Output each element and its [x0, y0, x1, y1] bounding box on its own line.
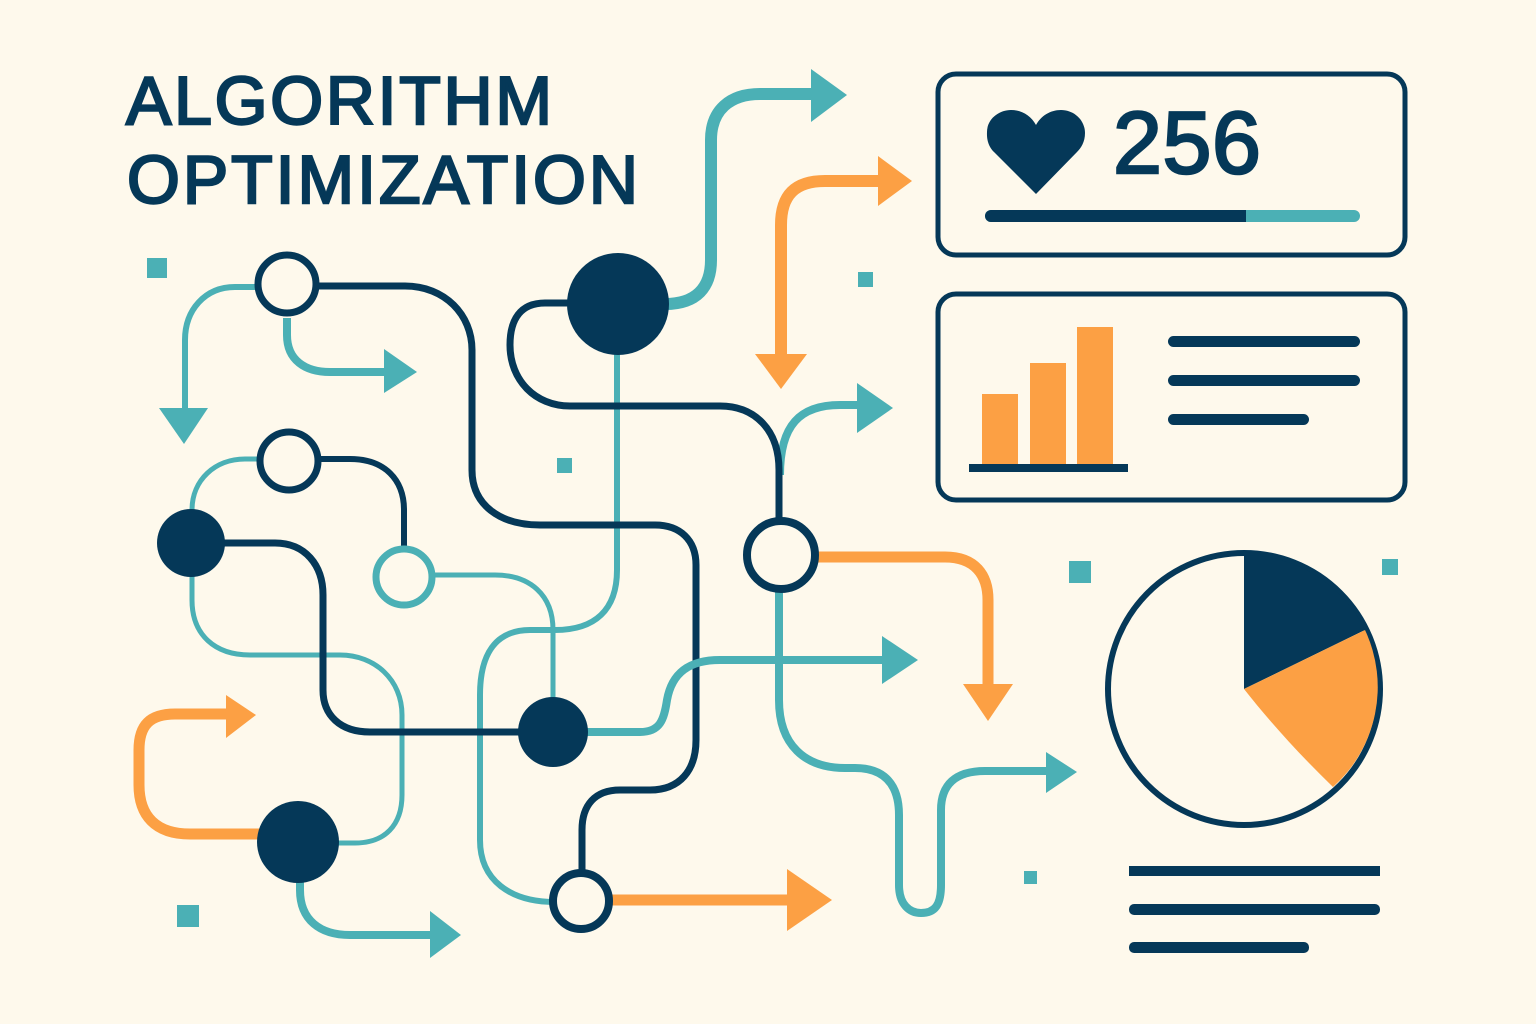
- teal arrow: lower right long curve: [779, 590, 1077, 913]
- text placeholder lines: [1168, 336, 1360, 425]
- node: top large filled: [567, 253, 669, 355]
- teal arrow: top-left node curving down: [159, 287, 258, 444]
- orange arrow: bottom circle to right: [610, 869, 832, 931]
- node: left filled: [157, 509, 225, 577]
- teal arrow: top-left node curving right: [287, 318, 417, 393]
- score number: 256: [1113, 93, 1261, 192]
- title: ALGORITHM: [126, 63, 552, 139]
- legend placeholder lines: [1129, 866, 1380, 953]
- node: top-left hollow: [258, 255, 316, 313]
- teal line: small teal circle to middle node: [435, 575, 553, 700]
- node: bottom-left filled: [257, 801, 339, 883]
- orange arrow: right circle down: [815, 557, 1013, 721]
- node: teal hollow: [376, 549, 432, 605]
- node: right hollow: [747, 521, 815, 589]
- orange double arrow: [755, 156, 912, 389]
- progress bar: [985, 210, 1360, 222]
- bar chart: [969, 327, 1128, 472]
- teal line: second node looping to lower node: [192, 459, 402, 843]
- node: middle filled: [518, 697, 588, 767]
- pie chart: [1108, 553, 1380, 825]
- title: [126, 63, 638, 218]
- navy line: second node to teal circle: [320, 459, 404, 548]
- teal line: top node down to lower circle: [480, 350, 617, 902]
- icon: heart: [987, 110, 1085, 194]
- node: second hollow: [260, 432, 318, 490]
- panel: bar chart summary: [938, 294, 1405, 500]
- teal arrow: branch to the bar chart panel: [780, 383, 893, 475]
- teal arrow: bottom node to lower right: [300, 880, 461, 958]
- teal arrow: middle node to right: [586, 636, 918, 732]
- navy line: left node to middle node: [222, 543, 520, 732]
- orange arrow: left loop: [139, 695, 260, 834]
- decorative teal squares: [147, 258, 1398, 927]
- title: OPTIMIZATION: [127, 142, 638, 218]
- navy line: top node loop to right circle: [510, 303, 779, 520]
- navy line: top-left node to bottom circle: [318, 286, 696, 872]
- teal arrow: top node to upper right: [665, 69, 847, 304]
- panel: likes score: [938, 74, 1405, 255]
- node: bottom hollow: [553, 873, 609, 929]
